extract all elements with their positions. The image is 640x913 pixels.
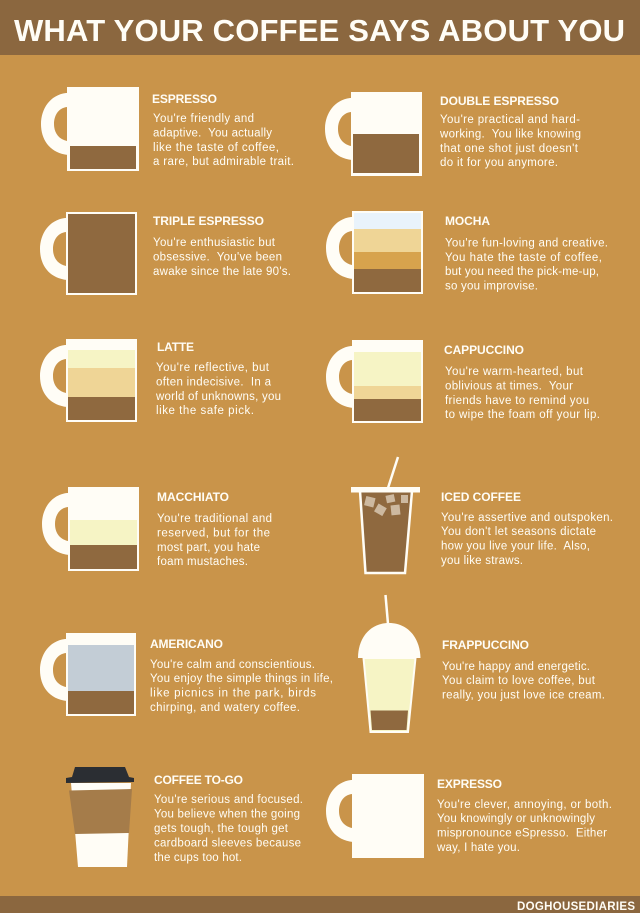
text: iced coffee xyxy=(441,490,613,567)
text: coffee to-go: gets tough, the tough get xyxy=(154,823,289,835)
mug: latte xyxy=(40,339,137,422)
text: cappuccino xyxy=(444,343,600,421)
text: expresso xyxy=(436,777,612,854)
text: double espresso: do it for you anymore. xyxy=(440,157,558,169)
text: latte xyxy=(155,340,281,417)
text: macchiato: most part, you hate xyxy=(157,542,260,554)
mug: triple espresso xyxy=(40,212,137,295)
text: coffee to-go xyxy=(154,773,303,864)
text: espresso: like the taste of coffee, xyxy=(153,142,279,154)
text: iced coffee: ICED COFFEE xyxy=(441,490,521,504)
text: triple espresso: obsessive. You've been xyxy=(153,252,282,264)
text: macchiato: MACCHIATO xyxy=(157,490,229,504)
text: expresso: You knowingly or unknowingly xyxy=(437,813,595,825)
text: mocha: MOCHA xyxy=(445,214,490,228)
text: latte: often indecisive. In a xyxy=(156,376,272,388)
text: americano: chirping, and watery coffee. xyxy=(150,702,300,714)
text: macchiato xyxy=(157,490,272,568)
cup: coffee to-go xyxy=(66,767,134,867)
text: americano: AMERICANO xyxy=(150,637,223,651)
text: mocha: so you improvise. xyxy=(445,280,538,292)
text: iced coffee: You're assertive and outspoken. xyxy=(441,512,613,524)
text: expresso: EXPRESSO xyxy=(437,777,502,791)
footer banner: DOGHOUSEDIARIES xyxy=(517,901,635,913)
text: coffee to-go: cardboard sleeves because xyxy=(154,838,301,850)
text: frappuccino: really, you just love ice cream. xyxy=(442,690,605,702)
text: americano: like picnics in the park, birds xyxy=(150,688,316,700)
text: expresso: way, I hate you. xyxy=(436,842,520,854)
text: iced coffee: you like straws. xyxy=(441,555,523,567)
text: espresso: a rare, but admirable trait. xyxy=(153,156,294,168)
text: iced coffee: how you live your life. Also, xyxy=(441,540,590,552)
text: mocha: You're fun-loving and creative. xyxy=(445,238,608,250)
text: triple espresso: awake since the late 90's. xyxy=(153,266,291,278)
text: espresso: adaptive. You actually xyxy=(153,128,272,140)
text: coffee to-go: You're serious and focused. xyxy=(154,794,303,806)
text: triple espresso: You're enthusiastic but xyxy=(153,237,276,249)
footer banner xyxy=(0,896,640,913)
text: frappuccino: You claim to love coffee, but xyxy=(442,675,596,687)
text: cappuccino: You're warm-hearted, but xyxy=(445,366,584,378)
mug: cappuccino xyxy=(326,340,423,423)
text: frappuccino: You're happy and energetic. xyxy=(442,661,590,673)
text: espresso: ESPRESSO xyxy=(152,92,217,106)
text: frappuccino: FRAPPUCCINO xyxy=(442,638,529,652)
mug: espresso xyxy=(41,87,139,171)
text: cappuccino: to wipe the foam off your lip. xyxy=(445,409,600,421)
text: macchiato: foam mustaches. xyxy=(157,556,248,568)
text: latte: like the safe pick. xyxy=(156,405,254,417)
text: cappuccino: oblivious at times. Your xyxy=(445,380,573,392)
mug: expresso xyxy=(326,774,424,858)
text: espresso: You're friendly and xyxy=(153,113,254,125)
text: cappuccino: CAPPUCCINO xyxy=(444,343,524,357)
mug: americano xyxy=(40,633,136,716)
text: macchiato: You're traditional and xyxy=(157,513,272,525)
text: americano: You're calm and conscientious. xyxy=(150,659,315,671)
text: double espresso: that one shot just doesn't xyxy=(440,143,579,155)
text: iced coffee: You don't let seasons dictate xyxy=(441,526,596,538)
text: expresso: mispronounce eSpresso. Either xyxy=(437,828,607,840)
text: coffee to-go: the cups too hot. xyxy=(154,852,242,864)
text: double espresso: working. You like knowing xyxy=(439,128,581,140)
text: mocha xyxy=(445,214,608,292)
text: triple espresso xyxy=(153,214,291,278)
mug: mocha xyxy=(326,211,423,294)
text: macchiato: reserved, but for the xyxy=(157,528,270,540)
text: latte: LATTE xyxy=(157,340,194,354)
mug: macchiato xyxy=(42,487,139,571)
text: expresso: You're clever, annoying, or both. xyxy=(437,799,612,811)
mug: double espresso xyxy=(325,92,422,176)
text: mocha: but you need the pick-me-up, xyxy=(445,266,599,278)
text: coffee to-go: COFFEE TO-GO xyxy=(154,773,243,787)
cup: iced coffee xyxy=(351,457,420,573)
text: frappuccino xyxy=(442,638,605,702)
text: coffee to-go: You believe when the going xyxy=(154,808,300,820)
text: americano xyxy=(150,637,333,714)
text: americano: You enjoy the simple things in life, xyxy=(150,673,333,685)
text: cappuccino: friends have to remind you xyxy=(445,395,589,407)
text: latte: world of unknowns, you xyxy=(155,391,281,403)
title banner xyxy=(0,0,640,55)
text: double espresso xyxy=(439,94,581,169)
title banner: WHAT YOUR COFFEE SAYS ABOUT YOU xyxy=(14,13,625,48)
text: double espresso: DOUBLE ESPRESSO xyxy=(440,94,559,108)
text: espresso xyxy=(152,92,294,168)
text: double espresso: You're practical and hard- xyxy=(440,114,580,126)
cup: frappuccino xyxy=(358,595,420,732)
text: triple espresso: TRIPLE ESPRESSO xyxy=(153,214,264,228)
text: mocha: You hate the taste of coffee, xyxy=(445,252,602,264)
text: latte: You're reflective, but xyxy=(156,362,270,374)
